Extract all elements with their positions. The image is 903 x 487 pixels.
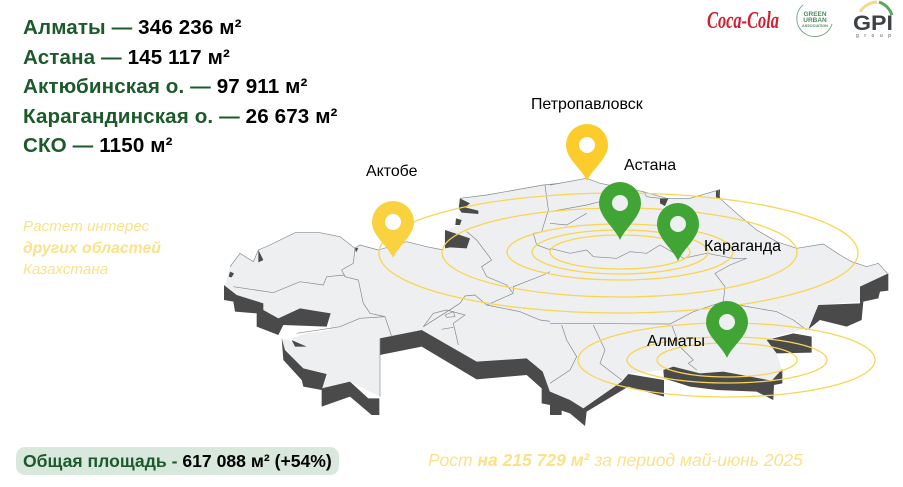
concentric rings: Almaty: [578, 323, 875, 397]
logo: Coca-Cola: Coca-Cola: [707, 8, 779, 34]
map west part: [224, 183, 562, 415]
total area pill: Общая площадь - 617 088 м² (+54%): [23, 451, 332, 471]
pin: Astana: [599, 182, 641, 240]
logo: Green Urban Association: URBAN: [803, 17, 827, 24]
concentric rings: north: [379, 193, 858, 313]
total area pill: [16, 447, 339, 475]
pin: Aktobe: [372, 201, 414, 258]
label: Petropavlovsk: Петропавловск: [531, 96, 644, 113]
logo: Green Urban Association: GREEN: [803, 11, 827, 18]
logo: Green Urban Association: [797, 5, 832, 37]
logo: Green Urban Association: ASSOCIATION: [802, 24, 828, 28]
item: Karaganda region: Карагандинская о. — 26 673 м²: [23, 105, 338, 128]
pin: Almaty: [706, 301, 748, 358]
map labels: [366, 96, 781, 350]
pin: Karaganda: [657, 203, 699, 261]
note: growing interest: Казахстана: [23, 261, 108, 278]
item: Astana: Астана — 145 117 м²: [23, 46, 230, 69]
label: Almaty: Алматы: [647, 333, 705, 350]
map east part: [550, 178, 888, 426]
item: Aktobe region: Актюбинская о. — 97 911 м²: [23, 75, 307, 98]
list of regions and areas: [23, 16, 338, 157]
note: growing interest: Растет интерес: [23, 218, 149, 235]
label: Aktobe: Актобе: [366, 163, 418, 180]
item: Almaty: Алматы — 346 236 м²: [23, 16, 242, 39]
label: Astana: Астана: [624, 157, 676, 174]
label: Karaganda: Караганда: [704, 238, 781, 255]
logo: GPI group: GPI: [853, 12, 893, 35]
item: North Kazakhstan region: СКО — 1150 м²: [23, 134, 173, 157]
note: growing interest: других областей: [23, 240, 161, 256]
logo: GPI group: group: [856, 33, 891, 39]
map: land and regions: [224, 178, 888, 426]
pin: Petropavlovsk: [566, 124, 608, 181]
note: growing interest: [23, 218, 161, 278]
growth caption: Рост на 215 729 м² за период май-июнь 2025: [428, 450, 803, 470]
logo: GPI group: [853, 2, 893, 39]
